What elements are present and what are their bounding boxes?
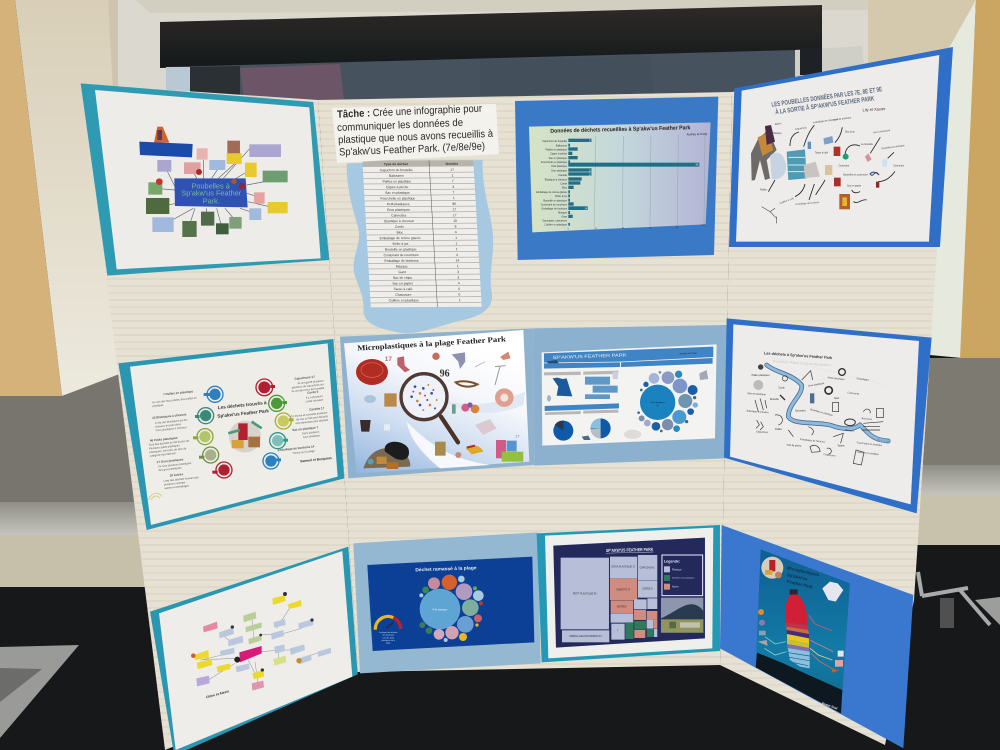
title: Microplastiques à la plage Feather Park bbox=[357, 334, 507, 353]
slide title: Déchet ramassé à la plage bbox=[415, 565, 477, 572]
treemap slide bbox=[553, 538, 705, 648]
déchet ramassé slide: sont des petits bbox=[382, 636, 394, 639]
panel: poubelles données à la sortie bbox=[729, 47, 953, 247]
data table: Sac en plastique bbox=[385, 191, 410, 195]
sketch labels: Bouteille bbox=[770, 398, 780, 401]
data table: Sac en papier bbox=[392, 281, 414, 286]
right text blocks: sacs plastique bbox=[303, 433, 320, 439]
small labels: emballage de chaussure bbox=[813, 118, 839, 124]
bar chart: 0 bbox=[568, 228, 570, 230]
light blue mat bbox=[353, 532, 541, 673]
left text blocks: 26 Autres bbox=[170, 472, 184, 477]
left text blocks: 96 Petits plastiques bbox=[150, 436, 178, 443]
data table: 1 bbox=[457, 264, 459, 268]
data table: 17 bbox=[453, 213, 457, 217]
small labels: Bouteilles en plastique bbox=[881, 144, 906, 150]
bar chart: Sac/papier, chaussure bbox=[542, 220, 568, 223]
central box bbox=[174, 178, 248, 207]
data table: Élastique à cheveux bbox=[384, 218, 414, 223]
legend bbox=[662, 555, 703, 596]
bar chart: Masque bbox=[558, 212, 568, 215]
panel: microplastiques poster and bubble poster bbox=[340, 325, 727, 478]
bar chart: Capuchon de bouteille bbox=[542, 140, 568, 143]
arrows bbox=[768, 125, 895, 203]
déchet ramassé slide: plage. bbox=[386, 643, 391, 645]
bar chart: Petit plastique bbox=[551, 165, 568, 168]
gauge bbox=[375, 616, 401, 630]
blue blob bbox=[347, 160, 493, 333]
legend: Déchets non plastiques bbox=[672, 576, 694, 579]
data table: Ballounne bbox=[389, 174, 404, 178]
right text blocks: de ces un fait peut déchets bbox=[296, 414, 329, 421]
small labels: Tasse à café bbox=[815, 152, 829, 154]
data table: 4 bbox=[458, 287, 460, 291]
bar chart: Corde bbox=[560, 183, 568, 186]
bar chart: Emballage de crème glacée bbox=[536, 191, 568, 194]
data table: Corde bbox=[395, 225, 404, 229]
data table: 9 bbox=[454, 225, 457, 229]
park photo bbox=[661, 598, 703, 633]
data table: 1 bbox=[453, 196, 455, 200]
right text blocks: corde trouvées bbox=[305, 397, 324, 403]
sketch labels: Cannettes bbox=[795, 410, 806, 413]
bar chart: 14 bbox=[584, 207, 588, 210]
data table: Fourchette en plastique bbox=[380, 196, 415, 201]
treemap slide: EMBALLAGE DE BONBON 14 bbox=[570, 635, 602, 638]
left text blocks: plastiques, sont plus de plus de bbox=[149, 446, 187, 454]
left text blocks: plusieurs canettes bbox=[164, 480, 186, 486]
data table: 1 bbox=[459, 298, 461, 302]
authors: Chloe et Alexis bbox=[206, 689, 230, 699]
small labels: sacs de plastique bbox=[833, 116, 852, 122]
data table: Gros plastiques bbox=[387, 208, 410, 212]
data table: Emballage de bonbons bbox=[384, 259, 419, 263]
bottle cap bbox=[356, 356, 392, 385]
small items bbox=[360, 352, 523, 462]
legend: Légende: bbox=[664, 559, 680, 563]
right text blocks: Ils ont des trucs de bouteille bbox=[291, 386, 325, 393]
decorative icons bbox=[148, 493, 162, 500]
header band: SP'AKW'US FEATHER PARK bbox=[553, 352, 627, 360]
small labels: Cannettes bbox=[893, 165, 905, 168]
sketch labels: Emballages de bonbons bbox=[800, 439, 826, 444]
poster title: Feather Park bbox=[786, 579, 814, 590]
authors: Samuel et Benjamin bbox=[300, 456, 332, 463]
déchet ramassé slide: La plupart des déchets bbox=[379, 631, 398, 634]
central node bbox=[234, 646, 262, 663]
bubble chart: Petits plastiques bbox=[650, 401, 665, 404]
central title: Les déchets trouvés à bbox=[218, 400, 267, 410]
data table: Bouteille en plastique bbox=[385, 247, 417, 252]
data table: 1 bbox=[455, 236, 457, 240]
sketch labels: Bouchons bbox=[862, 418, 873, 421]
treemap slide: CAPUCHONS bbox=[640, 566, 655, 569]
left text blocks: Ce sont plusieurs plastiques bbox=[158, 461, 192, 468]
bar chart: 20 bbox=[595, 228, 598, 230]
right text blocks: Corde 9 bbox=[307, 390, 319, 395]
bar chart: 100 bbox=[702, 225, 706, 227]
bar chart: Cigare à pêche bbox=[550, 153, 568, 156]
side labels bbox=[764, 615, 833, 669]
data table: 1 bbox=[456, 247, 458, 251]
small labels: sac à chaussure bbox=[873, 129, 891, 134]
panel: data table on blue blob bbox=[347, 160, 493, 333]
sketch labels: Pailles plastiques bbox=[752, 374, 770, 377]
bar chart: 17 bbox=[589, 139, 592, 142]
task instruction card: plastique que nous avons recueillis à bbox=[338, 128, 493, 146]
treemap slide: GROS PLASTIQUE 17 bbox=[611, 566, 636, 569]
title banner bbox=[139, 142, 193, 157]
left text blocks: 23 Élastiques à cheveux bbox=[152, 411, 187, 420]
poster title: Microplastiques bbox=[786, 565, 820, 578]
sketch labels: Gros plastiques bbox=[808, 382, 825, 388]
connector lines bbox=[155, 148, 277, 227]
small labels: Capuchons bbox=[795, 127, 808, 131]
bar chart: Pailles en plastique bbox=[546, 148, 568, 151]
sketch labels bbox=[747, 374, 883, 458]
left text blocks: autres et emballages bbox=[164, 483, 190, 490]
left text blocks: Gros plastiques à cheveux bbox=[155, 425, 188, 432]
bar chart: Canette bbox=[558, 174, 568, 177]
heading: Les déchets à Sp'akw'us Feather Park bbox=[764, 351, 833, 360]
panels: beach bubble chart and treemap bbox=[353, 525, 720, 673]
heading: Feather Park instrumentation bbox=[773, 359, 831, 367]
panel: bar chart on blue mat bbox=[515, 97, 718, 260]
left text blocks bbox=[148, 389, 200, 490]
sketch labels: Contenants bbox=[847, 391, 860, 396]
sink left bbox=[0, 645, 79, 738]
treemap slide: PETIT PLASTIQUE 96 bbox=[573, 593, 597, 596]
left text blocks: Liste des déchets trouvés des bbox=[163, 475, 199, 483]
treemap slide: CORDE 9 bbox=[642, 589, 653, 591]
sketch labels: Corde bbox=[778, 386, 785, 389]
left text blocks: des gros plastiques. bbox=[158, 466, 183, 472]
bar chart: Fourchette en plastique bbox=[541, 161, 568, 164]
bar chart: 40 bbox=[622, 228, 625, 230]
bar chart: Boîte à jus bbox=[555, 195, 568, 198]
small labels: Bouteilles et couvercles bbox=[843, 173, 869, 176]
data table: Chaussure bbox=[395, 293, 412, 297]
bottle cap: 17 bbox=[385, 356, 392, 363]
panel: mind map Chloe et Alexis bbox=[150, 547, 358, 750]
data table: 96 bbox=[452, 202, 456, 206]
small labels: Contenant bbox=[838, 165, 849, 168]
teal mat bbox=[537, 525, 720, 662]
data table: 17 bbox=[453, 208, 457, 212]
data table: 4 bbox=[455, 230, 457, 234]
category icons bbox=[193, 379, 294, 478]
task instruction card: Sp'akw'us Feather Park. (7e/8e/9e) bbox=[339, 140, 485, 158]
waste collage bbox=[761, 557, 783, 579]
bar chart: Emballage de bonbons bbox=[542, 208, 568, 211]
central collage bbox=[228, 421, 262, 453]
small labels: La bouteille bbox=[861, 143, 874, 146]
data table: Sac de chips bbox=[393, 276, 412, 280]
bar chart: Bloc bbox=[562, 187, 568, 190]
sketch labels: Bouteilles en plastique bbox=[810, 408, 834, 417]
connectors bbox=[200, 605, 322, 685]
bar chart: 60 bbox=[649, 227, 652, 229]
bar chart: 80 bbox=[676, 227, 679, 229]
left text blocks: 17 Gros plastiques bbox=[156, 457, 184, 464]
data table bbox=[362, 160, 482, 307]
treemap slide: CANETTE 17 bbox=[616, 588, 631, 591]
poster credit: Poster final bbox=[821, 701, 838, 711]
bar chart: 17 bbox=[589, 173, 592, 176]
left text blocks: À Ste des élastiques qui tirs bbox=[155, 418, 188, 425]
data table: Emballage de crème glacée bbox=[379, 236, 421, 240]
panel: déchets trouvés radial bbox=[118, 339, 344, 530]
river bbox=[767, 365, 888, 441]
legend: Autres bbox=[672, 586, 680, 589]
sketch labels: Tasses bbox=[837, 446, 845, 448]
data table: Petit plastiques bbox=[387, 202, 410, 206]
sketch labels: Filet de pêche bbox=[787, 444, 802, 448]
data table: 0 bbox=[458, 293, 461, 297]
heading: À LA SORTIE À SP'AKW'US FEATHER PARK bbox=[775, 93, 875, 116]
data table: Nombre bbox=[445, 162, 458, 166]
data table: 1 bbox=[451, 174, 454, 178]
left text blocks: cheveux trouvés dans bbox=[155, 422, 182, 429]
treemap title: SP'AKW'US FEATHER PARK bbox=[606, 547, 654, 553]
right text blocks: plusieurs de capuchons sur bbox=[292, 382, 324, 389]
packed bubbles bbox=[419, 575, 484, 642]
data table: Cigare à pêche bbox=[386, 185, 409, 189]
treemap bbox=[561, 555, 657, 642]
bar chart: Sac en plastique bbox=[549, 157, 568, 160]
sketch labels: Emballages bbox=[857, 378, 870, 382]
data cards bbox=[146, 141, 288, 237]
central box: Poubelles à bbox=[191, 182, 231, 191]
sketch labels: Petits plastiques bbox=[828, 376, 846, 381]
chart title: Audrey et Cody bbox=[687, 132, 708, 136]
treemap slide: 7 bbox=[617, 631, 619, 633]
light mat left bbox=[340, 328, 534, 478]
data table: 3 bbox=[457, 276, 460, 280]
right text blocks: Emballage de bonbons 14 bbox=[277, 444, 315, 452]
right text blocks bbox=[277, 374, 329, 457]
déchet ramassé slide: des plastiques bbox=[382, 634, 394, 637]
treemap slide: AUTRES bbox=[617, 605, 627, 608]
data table: 10 bbox=[453, 219, 457, 223]
data table: Cuillère en plastique bbox=[389, 298, 419, 303]
small labels: Ballon bbox=[775, 123, 782, 126]
bubble chart bbox=[582, 370, 708, 440]
small labels: Sac en papier bbox=[847, 185, 862, 188]
poster title bbox=[786, 565, 820, 590]
left text blocks: Je vois des trucs plastic des pailles en bbox=[152, 396, 198, 404]
data table: 14 bbox=[455, 259, 460, 263]
small labels: Cuillère à café bbox=[779, 197, 795, 205]
task instruction card bbox=[332, 103, 499, 163]
magnifying glass bbox=[401, 374, 458, 442]
data table: 17 bbox=[450, 168, 454, 172]
panel: river map sketchnote bbox=[724, 318, 932, 513]
data table: Capuchon de bouteille bbox=[380, 168, 413, 172]
small labels bbox=[760, 116, 906, 206]
bar chart: Gros plastique bbox=[551, 170, 568, 173]
bar chart: Contenant de nourriture bbox=[541, 203, 568, 206]
data table: 7 bbox=[452, 191, 455, 195]
right text blocks: On trouve et cannette plusieurs bbox=[290, 410, 328, 418]
chart title: Données de déchets recueillies à Sp'akw'us Feather Park bbox=[550, 125, 691, 135]
person icon bbox=[154, 127, 169, 143]
task instruction card: communiquer les données de bbox=[337, 117, 463, 134]
data table: Contenant de nourriture bbox=[383, 253, 419, 257]
sketch labels: Fourchettes en plastique bbox=[857, 441, 883, 447]
right text blocks: Il y a plusieurs bbox=[306, 394, 324, 400]
right text blocks: sont devenues plus déchets bbox=[295, 418, 329, 425]
map and info bbox=[544, 371, 618, 402]
heading: LES POUBELLES DONNÉES PAR LES 7E, 8E ET 9E bbox=[771, 84, 883, 109]
Sp'akw'us Feather Park paper bbox=[542, 344, 717, 446]
left text blocks: 7 Pailles en plastique bbox=[163, 389, 194, 396]
branch nodes bbox=[191, 592, 331, 691]
sketch labels: Cuillères en plastique bbox=[857, 451, 880, 456]
central title bbox=[217, 400, 270, 419]
left text blocks: catégorie des déchets. bbox=[150, 451, 177, 458]
déchet ramassé slide: plastiques sur la bbox=[382, 639, 396, 642]
left text blocks: Sont des déchets du fait le plus de bbox=[148, 439, 190, 447]
author: Lily et Xavier bbox=[862, 106, 886, 112]
chart title bbox=[550, 125, 708, 140]
right text blocks: Sac en plastique 7 bbox=[292, 425, 319, 432]
data table: Gant bbox=[398, 270, 406, 274]
plastic bag bbox=[822, 582, 843, 602]
bar chart: 17 bbox=[589, 169, 592, 172]
bar chart: Gant bbox=[562, 216, 567, 219]
sketch labels: Sacs bbox=[834, 398, 840, 400]
small labels: Masque bbox=[773, 133, 782, 135]
header band: Jasmine et Tristan bbox=[679, 352, 698, 355]
legend: Plastique bbox=[672, 568, 682, 571]
pie charts bbox=[553, 418, 611, 441]
faucet bbox=[918, 572, 1000, 628]
header band bbox=[544, 347, 713, 367]
sketch labels: Masques bbox=[845, 430, 855, 433]
small waste icons bbox=[808, 136, 887, 209]
central title: Sp'akw'us Feather Park bbox=[217, 408, 270, 419]
packed bubbles: Petit plastique bbox=[433, 608, 448, 611]
right text blocks: Canette 17 bbox=[309, 406, 325, 412]
small items: 17 bbox=[515, 433, 520, 438]
sketch labels: Capuchons bbox=[756, 431, 769, 434]
heading bbox=[764, 351, 887, 385]
seabed bbox=[756, 653, 842, 713]
person with bin illustration bbox=[751, 125, 820, 181]
small labels: Pailles bbox=[760, 190, 768, 192]
left text blocks: plastique. bbox=[152, 403, 164, 408]
déchet ramassé slide bbox=[367, 557, 534, 651]
sketch labels: Élastiques à cheveux bbox=[747, 410, 770, 414]
data table: Tasse à café bbox=[394, 287, 413, 291]
small labels: Sac à jus bbox=[845, 132, 855, 134]
bar chart: Ballounne bbox=[556, 144, 568, 147]
central box: Park. bbox=[203, 196, 220, 205]
data table: 1 bbox=[455, 242, 458, 246]
right text blocks: Trouve sur la plage bbox=[292, 449, 315, 455]
data table: Boîte à jus bbox=[392, 242, 409, 246]
data table: Type de déchet bbox=[384, 162, 409, 166]
data table: Cannettes bbox=[391, 213, 407, 218]
number 96: 96 bbox=[440, 369, 450, 380]
right text blocks: Capuchons 17 bbox=[294, 375, 315, 381]
doodle icons bbox=[753, 365, 890, 465]
bar chart bbox=[536, 134, 706, 230]
data table: 3 bbox=[457, 270, 459, 274]
data table: Masque bbox=[396, 264, 408, 269]
bar chart: Élastique à cheveux bbox=[545, 179, 568, 182]
right text blocks: Dans plusieurs bbox=[302, 430, 320, 435]
microplastics paper bbox=[344, 330, 529, 473]
bar chart: Bouteille en plastique bbox=[543, 199, 568, 202]
data table: Bloc bbox=[396, 230, 403, 234]
sketch labels: Chaussures bbox=[823, 453, 837, 458]
light mat right bbox=[533, 325, 727, 466]
data table: 4 bbox=[458, 281, 460, 285]
heading bbox=[771, 84, 883, 116]
left text blocks: Plusieurs petits plastiques bbox=[149, 443, 180, 450]
panel: bottle poster bbox=[720, 525, 913, 748]
bubble chart: 96 bbox=[657, 405, 660, 407]
data table: Pailles en plastique bbox=[382, 179, 411, 184]
task instruction card: Tâche : Crée une infographie pour bbox=[337, 103, 483, 121]
data table: 4 bbox=[456, 253, 458, 257]
bar chart: 96 bbox=[696, 164, 699, 167]
data table: 3 bbox=[452, 185, 454, 189]
small labels: Emballage de bonbons bbox=[796, 202, 820, 206]
garbage pile bbox=[363, 442, 410, 469]
bar chart: Cuillère en plastique bbox=[544, 224, 568, 227]
central box: Sp'akw'us Feather bbox=[181, 188, 242, 197]
data table: 7 bbox=[452, 179, 454, 183]
right text blocks: Ils ont gardé plusieurs bbox=[297, 378, 324, 385]
panel: poubelles mind map bbox=[81, 83, 329, 276]
poster title: Sp'akw'us bbox=[786, 572, 808, 582]
bottle bbox=[786, 589, 810, 668]
sketch labels: Sacs en plastique bbox=[747, 392, 767, 396]
sketch labels: Pailles bbox=[775, 429, 783, 431]
